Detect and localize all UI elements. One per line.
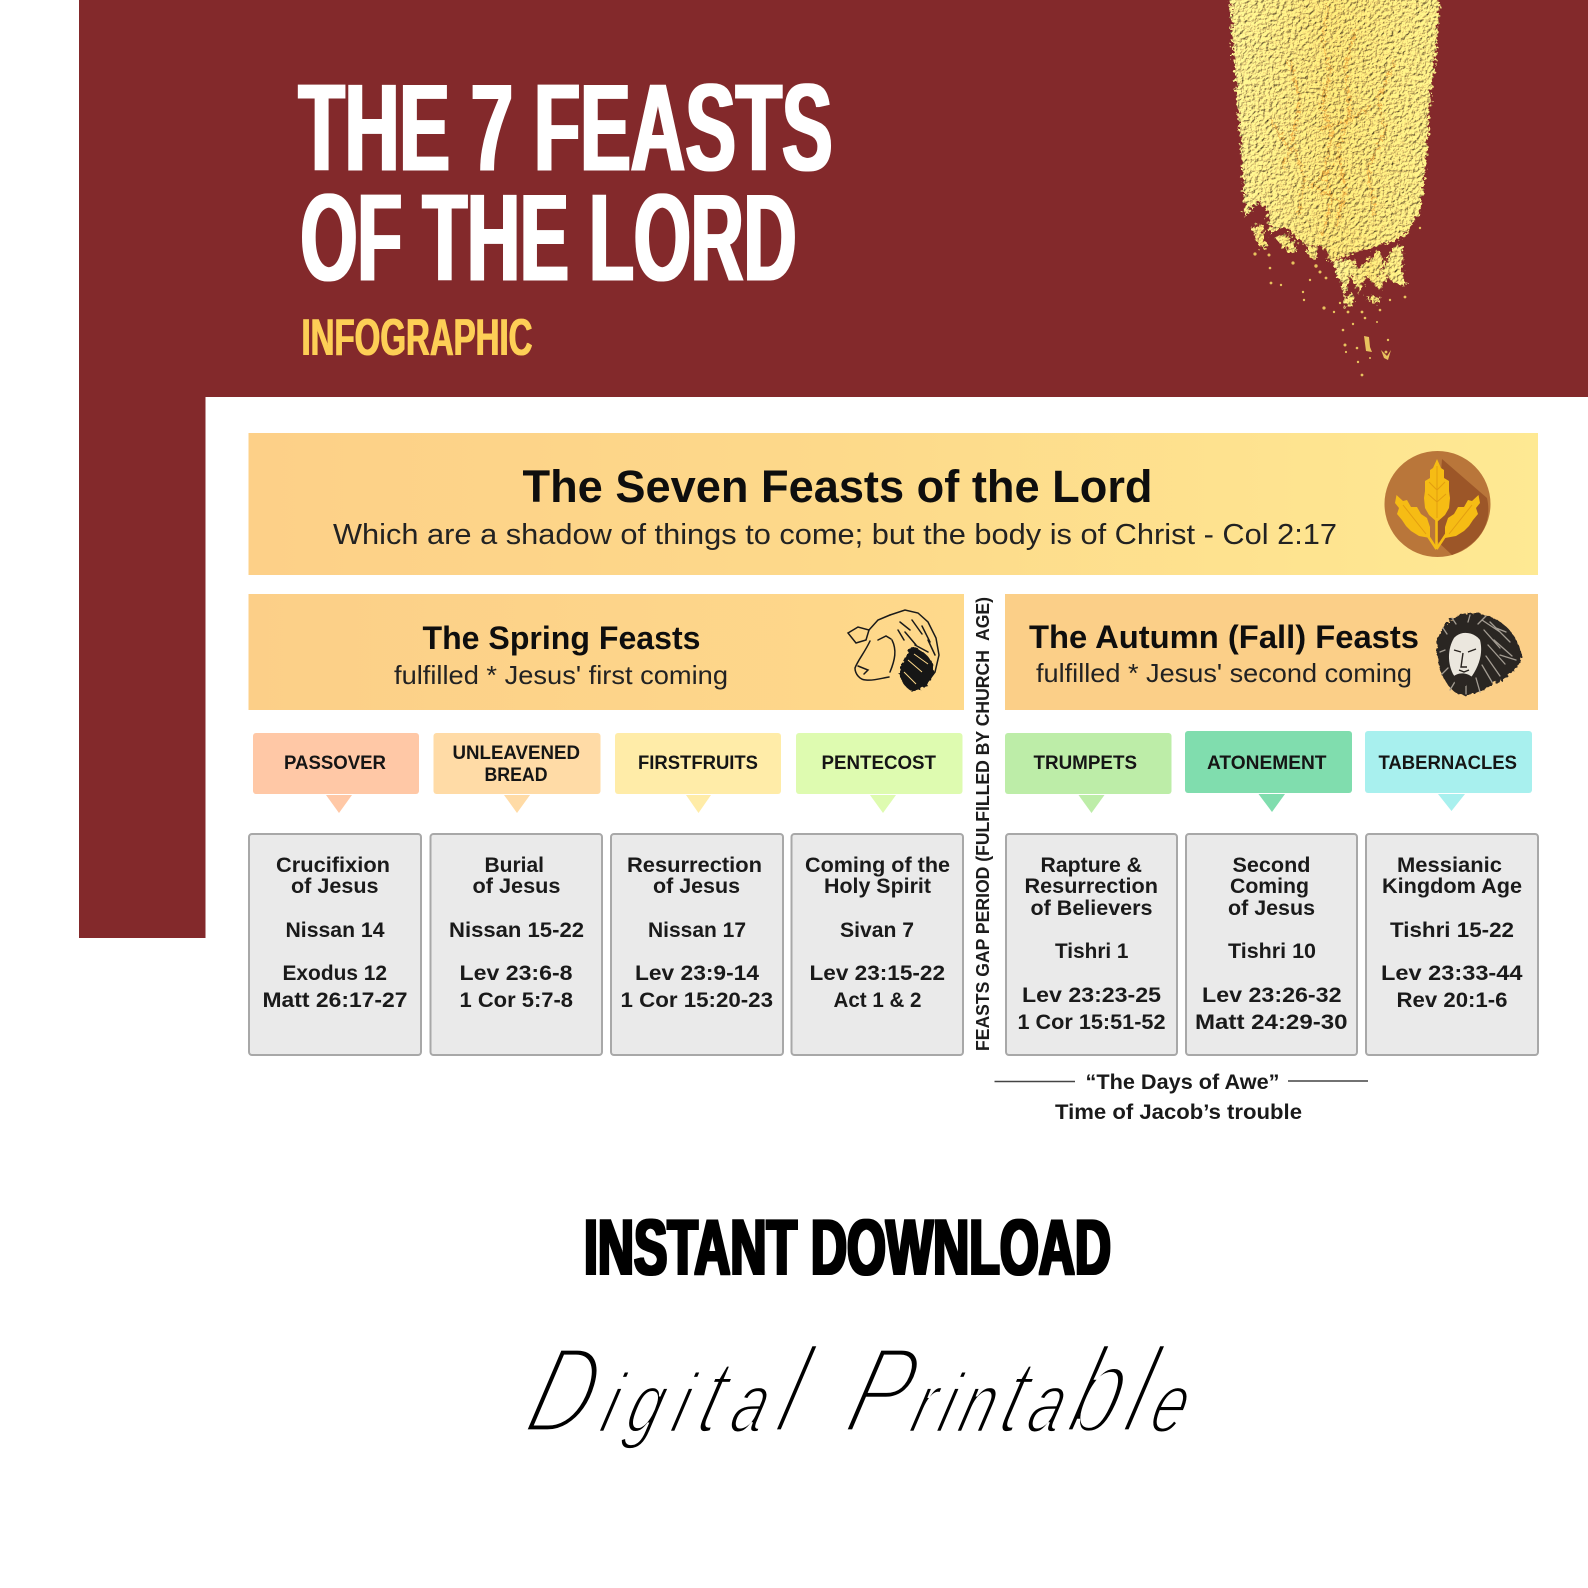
- card: pentecost details: Act 1 & 2: [834, 988, 922, 1012]
- rotated label: feasts gap period: FEASTS GAP PERIOD (FULFILLED BY CHURCH AGE): [972, 597, 993, 1051]
- feast label: firstfruits: FIRSTFRUITS: [638, 752, 758, 774]
- card: unleavened bread details: Nissan 15-22: [449, 918, 584, 942]
- white content panel: [0, 397, 1588, 1588]
- digital printable script: [514, 1322, 1212, 1459]
- card: tabernacles details: Lev 23:33-44: [1381, 961, 1523, 985]
- feast label: pentecost: PENTECOST: [822, 752, 936, 774]
- note: the days of awe: “The Days of Awe”: [1086, 1070, 1280, 1094]
- card: trumpets details: of Believers: [1030, 896, 1153, 920]
- feast label: tabernacles: TABERNACLES: [1378, 752, 1517, 774]
- feast label: atonement: ATONEMENT: [1207, 752, 1327, 774]
- card: tabernacles details: [1366, 834, 1538, 1055]
- card: atonement details: Lev 23:26-32: [1202, 983, 1342, 1007]
- title: [298, 60, 832, 308]
- feast label: trumpets: [1005, 733, 1172, 813]
- card: firstfruits details: Nissan 17: [648, 918, 746, 942]
- title: THE 7 FEASTS: [298, 60, 832, 198]
- card: passover details: Nissan 14: [286, 918, 385, 942]
- card: unleavened bread details: Burial: [484, 853, 544, 877]
- card: passover details: Exodus 12: [282, 961, 387, 985]
- card: atonement details: Second: [1232, 853, 1310, 877]
- feast label: passover: PASSOVER: [284, 752, 386, 774]
- card: unleavened bread details: [430, 834, 602, 1055]
- panel: autumn feasts header: [1005, 594, 1538, 710]
- card: pentecost details: Coming of the: [805, 853, 950, 877]
- autumn subheading: fulfilled * Jesus' second coming: [1036, 658, 1412, 688]
- feast label: trumpets: TRUMPETS: [1034, 752, 1137, 774]
- card: tabernacles details: Tishri 15-22: [1390, 918, 1514, 942]
- spring subheading: fulfilled * Jesus' first coming: [394, 660, 728, 690]
- card: firstfruits details: Lev 23:9-14: [635, 961, 759, 985]
- card: unleavened bread details: Lev 23:6-8: [460, 961, 573, 985]
- top banner: [248, 433, 1538, 575]
- card: atonement details: Coming: [1230, 874, 1309, 898]
- card: tabernacles details: Messianic: [1397, 853, 1502, 877]
- title: OF THE LORD: [300, 170, 796, 308]
- card: firstfruits details: [611, 834, 783, 1055]
- feast label: unleavened bread: UNLEAVENED: [452, 742, 580, 764]
- card: pentecost details: Sivan 7: [840, 918, 914, 942]
- icon: lion head: [1437, 613, 1522, 695]
- card: atonement details: Matt 24:29-30: [1195, 1010, 1348, 1034]
- card: tabernacles details: Rev 20:1-6: [1396, 988, 1508, 1012]
- card: firstfruits details: Resurrection: [627, 853, 762, 877]
- panel: spring feasts header: [248, 594, 964, 710]
- card: trumpets details: Tishri 1: [1055, 939, 1129, 963]
- feast label: tabernacles: [1365, 731, 1532, 811]
- gold brush stroke: [1229, 0, 1440, 376]
- card: atonement details: Tishri 10: [1228, 939, 1316, 963]
- autumn heading: The Autumn (Fall) Feasts: [1029, 619, 1419, 655]
- card: trumpets details: Rapture &: [1040, 853, 1142, 877]
- card: tabernacles details: Kingdom Age: [1382, 874, 1522, 898]
- feast label: atonement: [1185, 731, 1352, 812]
- card: firstfruits details: of Jesus: [653, 874, 740, 898]
- subtitle: infographic: INFOGRAPHIC: [302, 309, 532, 367]
- feast label: unleavened bread: BREAD: [484, 764, 548, 786]
- spring heading: The Spring Feasts: [422, 620, 700, 656]
- card: passover details: Matt 26:17-27: [262, 988, 408, 1012]
- card: trumpets details: Resurrection: [1024, 874, 1158, 898]
- feast label: firstfruits: [615, 733, 781, 813]
- card: pentecost details: Holy Spirit: [824, 874, 931, 898]
- banner quote: Which are a shadow of things to come; but the body is of Christ - Col 2:17: [333, 519, 1337, 551]
- icon: lamb head: [848, 610, 939, 691]
- card: passover details: of Jesus: [291, 874, 379, 898]
- card: trumpets details: [1006, 834, 1177, 1055]
- card: atonement details: [1186, 834, 1357, 1055]
- card: trumpets details: 1 Cor 15:51-52: [1018, 1010, 1166, 1034]
- digital printable script: Digital: [514, 1322, 826, 1459]
- card: passover details: Crucifixion: [276, 853, 390, 877]
- feast label: pentecost: [796, 733, 962, 813]
- card: trumpets details: Lev 23:23-25: [1022, 983, 1161, 1007]
- card: pentecost details: Lev 23:15-22: [810, 961, 945, 985]
- feast label: passover: [253, 733, 419, 813]
- instant download heading: INSTANT DOWNLOAD: [584, 1203, 1111, 1291]
- banner heading: The Seven Feasts of the Lord: [522, 461, 1152, 512]
- card: unleavened bread details: 1 Cor 5:7-8: [460, 988, 573, 1012]
- note: the days of awe: Time of Jacob’s trouble: [1055, 1100, 1302, 1124]
- card: firstfruits details: 1 Cor 15:20-23: [620, 988, 773, 1012]
- gold specks: [1253, 227, 1421, 376]
- digital printable script: Printable: [834, 1322, 1212, 1459]
- card: pentecost details: [792, 834, 963, 1055]
- feast label: unleavened bread: [434, 733, 600, 813]
- icon: wheat: [1384, 451, 1490, 557]
- red header panel: [79, 0, 1588, 938]
- card: atonement details: of Jesus: [1228, 896, 1315, 920]
- card: passover details: [249, 834, 421, 1055]
- note: the days of awe: [994, 1070, 1368, 1124]
- card: unleavened bread details: of Jesus: [472, 874, 561, 898]
